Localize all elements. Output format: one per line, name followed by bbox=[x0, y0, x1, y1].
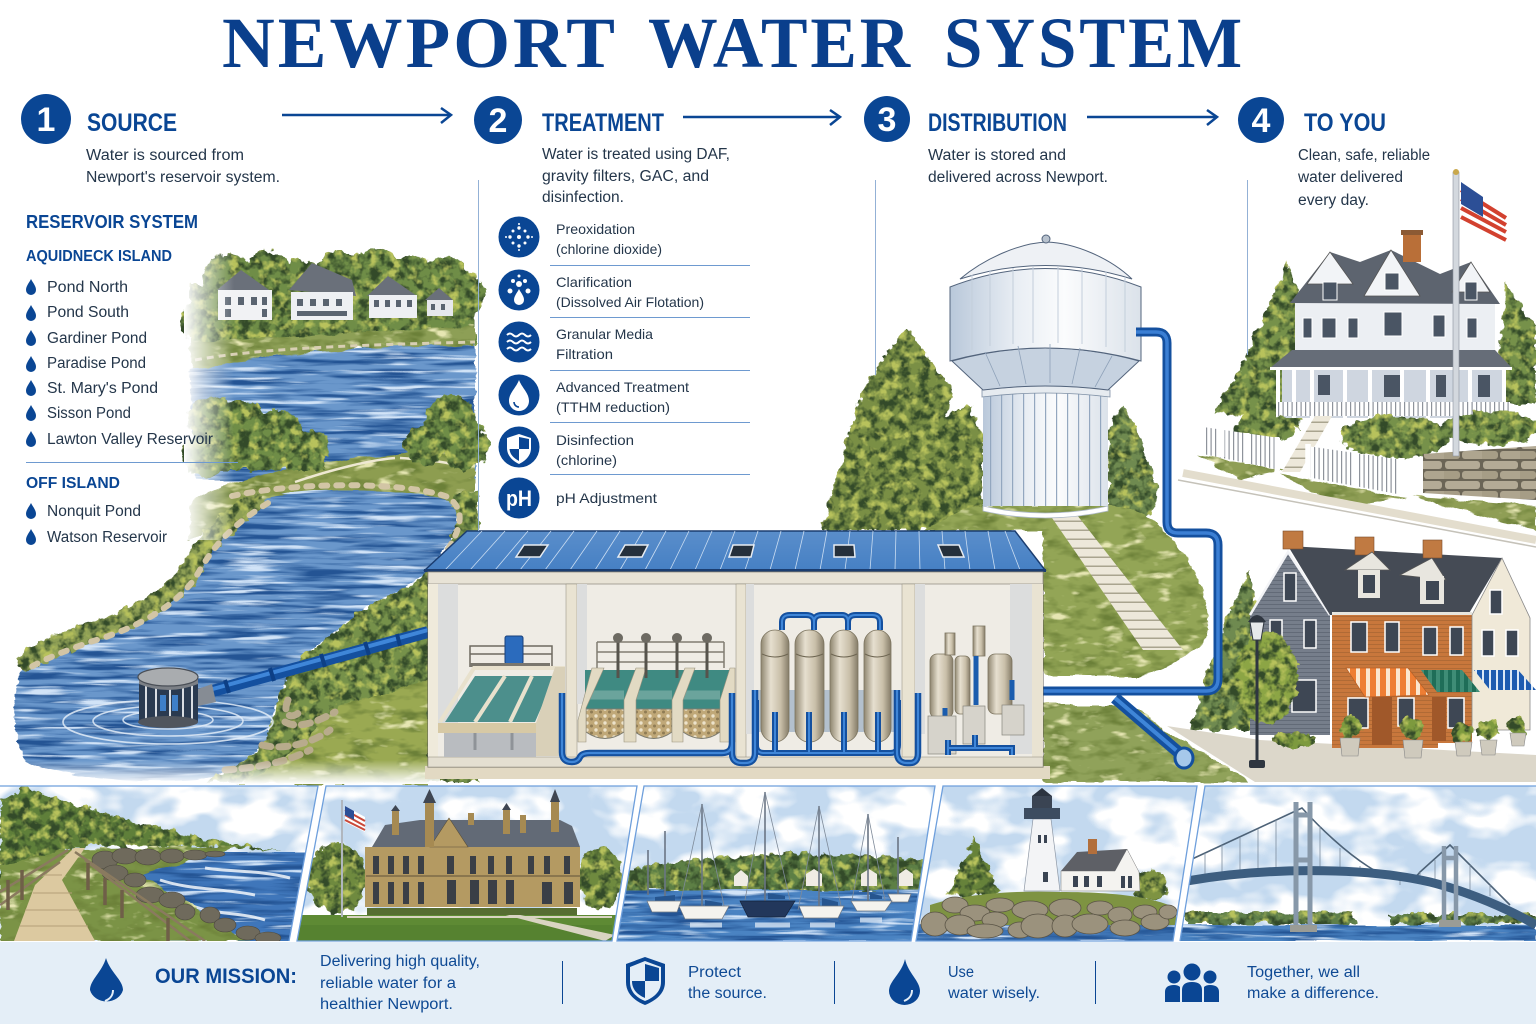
call to action: use wisely: Use bbox=[948, 964, 974, 981]
off island reservoirs: Watson Reservoir bbox=[47, 529, 167, 546]
panel: reservoir system list bbox=[26, 211, 238, 546]
illustration: blue delivery pipe bbox=[1043, 332, 1218, 768]
mission banner bbox=[0, 942, 1536, 1024]
description bbox=[928, 147, 1108, 186]
step: pH adjustment bbox=[498, 478, 657, 518]
flagpole and flag bbox=[1453, 169, 1506, 456]
title bbox=[222, 3, 1245, 83]
icon: pH bbox=[498, 478, 540, 518]
picket fence right bbox=[1307, 444, 1403, 496]
number badge 4 bbox=[1238, 97, 1284, 143]
lower lake bbox=[14, 490, 457, 781]
label: Clarification bbox=[556, 274, 632, 290]
side lawn bbox=[1043, 704, 1250, 782]
icon: shield bbox=[498, 426, 540, 468]
garden trees bbox=[1213, 263, 1536, 430]
boulders bbox=[92, 848, 281, 944]
call to action: together: make a difference. bbox=[1247, 985, 1379, 1002]
description: disinfection. bbox=[542, 189, 624, 206]
mission statement: healthier Newport. bbox=[320, 996, 453, 1013]
label: Preoxidation bbox=[556, 221, 635, 237]
cell 1: dissolved air flotation bbox=[438, 636, 565, 757]
description: Water is stored and bbox=[928, 147, 1066, 164]
icon: shield bbox=[626, 957, 665, 1005]
label: Disinfection bbox=[556, 432, 634, 448]
description: water delivered bbox=[1297, 169, 1403, 186]
trees behind the lakeside homes bbox=[181, 248, 486, 347]
planters bbox=[1273, 717, 1526, 758]
dormers bbox=[1345, 552, 1446, 604]
Aquidneck reservoirs: Lawton Valley Reservoir bbox=[47, 431, 213, 448]
water ripples round the intake bbox=[63, 700, 273, 744]
illustration: hill with water tower bbox=[823, 235, 1208, 676]
illustration: main street shops bbox=[1043, 531, 1536, 782]
icon: pH: pH bbox=[506, 486, 532, 511]
icon: dots burst bbox=[498, 216, 540, 258]
arrow: treatment to distribution bbox=[683, 110, 840, 125]
Aquidneck reservoirs bbox=[26, 279, 213, 448]
green awning bbox=[1421, 670, 1480, 692]
sidewalk bbox=[1183, 473, 1536, 540]
title: NEWPORT bbox=[222, 3, 618, 83]
icon: waves bbox=[498, 322, 540, 362]
heading: SOURCE bbox=[87, 109, 177, 137]
call to action: together bbox=[1247, 964, 1379, 1002]
upper lake shoreline bbox=[190, 326, 475, 368]
panel: treatment processes bbox=[498, 216, 750, 518]
dark main roof bbox=[1288, 546, 1502, 615]
stone wall bbox=[1423, 446, 1536, 500]
front steps bbox=[1282, 416, 1332, 472]
photo: mansion bbox=[295, 786, 640, 941]
Aquidneck reservoirs: St. Mary's Pond bbox=[47, 380, 158, 397]
arrow: distribution to you bbox=[1087, 110, 1217, 125]
icon: water drop bbox=[889, 959, 920, 1005]
label: Advanced Treatment bbox=[556, 379, 689, 395]
intake structure bbox=[138, 668, 216, 728]
Aquidneck reservoirs: Sisson Pond bbox=[47, 405, 131, 422]
panel: photo strip bbox=[0, 786, 1536, 944]
process pipework bbox=[562, 690, 918, 763]
tower base column bbox=[982, 386, 1110, 518]
description bbox=[542, 146, 730, 206]
lakeside home 4 bbox=[425, 288, 453, 316]
number badge 3: 3 bbox=[878, 101, 896, 139]
call to action: protect bbox=[688, 964, 767, 1002]
off island reservoirs bbox=[26, 503, 167, 546]
icon: drop bbox=[498, 374, 540, 416]
intake pipe bbox=[198, 630, 428, 695]
street lamp bbox=[1248, 615, 1266, 768]
title: WATER bbox=[648, 3, 913, 83]
walking path bbox=[14, 848, 95, 941]
step: disinfection bbox=[498, 426, 634, 468]
number badge 2: 2 bbox=[489, 102, 507, 140]
call to action: protect: the source. bbox=[688, 985, 767, 1002]
lakeside home 3 bbox=[367, 276, 417, 318]
mission statement bbox=[320, 953, 480, 1013]
cream house bbox=[1472, 558, 1530, 730]
number badge 3 bbox=[864, 96, 910, 142]
Aquidneck reservoirs: Paradise Pond bbox=[47, 355, 146, 372]
step: advanced treatment bbox=[498, 374, 689, 416]
wraparound porch bbox=[1270, 350, 1512, 418]
left shoreline bbox=[20, 497, 262, 665]
label: Filtration bbox=[556, 346, 613, 362]
right evergreen bbox=[1108, 405, 1158, 517]
pavement bbox=[1167, 726, 1536, 782]
photo: marina bbox=[615, 786, 940, 941]
mission statement: reliable water for a bbox=[320, 975, 456, 992]
blue awning bbox=[1474, 670, 1536, 690]
cell 2: granular media filters bbox=[578, 633, 735, 742]
label: (chlorine dioxide) bbox=[556, 241, 662, 257]
upper lake bbox=[190, 338, 475, 480]
subheading: Off Island: OFF ISLAND bbox=[26, 475, 120, 492]
description: Water is treated using DAF, bbox=[542, 146, 730, 163]
off island reservoirs: Nonquit Pond bbox=[47, 503, 141, 520]
step: granular media filtration bbox=[498, 322, 653, 362]
lakeside home 2 bbox=[289, 263, 356, 320]
cell 3: GAC vessels bbox=[756, 615, 898, 753]
Aquidneck reservoirs: Gardiner Pond bbox=[47, 330, 147, 347]
description: delivered across Newport. bbox=[928, 169, 1108, 186]
label: (TTHM reduction) bbox=[556, 399, 670, 415]
icon: people bbox=[1165, 964, 1219, 1002]
list heading: RESERVOIR SYSTEM bbox=[26, 211, 198, 232]
step 1: source bbox=[21, 94, 280, 186]
icon: mission drop bbox=[90, 958, 123, 1001]
label: pH Adjustment bbox=[556, 490, 657, 506]
label: (chlorine) bbox=[556, 452, 617, 468]
number badge 1: 1 bbox=[37, 101, 55, 139]
chimneys bbox=[1283, 531, 1442, 558]
icon: rising bubbles bbox=[498, 270, 540, 310]
call to action: use wisely: water wisely. bbox=[947, 985, 1040, 1002]
left evergreen bbox=[823, 328, 983, 530]
subheading: Aquidneck Island: AQUIDNECK ISLAND bbox=[26, 248, 172, 265]
tree clumps on upper lake bbox=[183, 394, 489, 477]
middle land bridge bbox=[190, 448, 475, 540]
panel frames bbox=[0, 786, 1536, 941]
island boulders bbox=[921, 897, 1177, 938]
description: every day. bbox=[1298, 192, 1369, 209]
ground under the building bbox=[425, 766, 1050, 779]
label bbox=[556, 432, 634, 468]
brick row bbox=[1332, 612, 1472, 748]
photo: lighthouse bbox=[915, 786, 1200, 941]
description: gravity filters, GAC, and bbox=[542, 168, 709, 185]
label: Granular Media bbox=[556, 326, 653, 342]
label: (Dissolved Air Flotation) bbox=[556, 294, 704, 310]
call to action: protect: Protect bbox=[688, 964, 742, 981]
lawn strips bbox=[1197, 455, 1536, 530]
heading: DISTRIBUTION bbox=[928, 109, 1067, 137]
Aquidneck reservoirs: Pond South bbox=[47, 304, 129, 321]
description bbox=[86, 147, 280, 186]
soft left fade bbox=[184, 240, 234, 540]
label bbox=[556, 379, 689, 415]
heading: TREATMENT bbox=[542, 109, 664, 137]
shrubs bbox=[1235, 411, 1536, 458]
illustration: reservoir landscape bbox=[0, 240, 489, 784]
house upper storey and roof bbox=[1290, 230, 1500, 352]
gray clapboard house bbox=[1250, 552, 1330, 735]
description bbox=[1297, 147, 1430, 209]
description: Water is sourced from bbox=[86, 147, 244, 164]
treatment plant building bbox=[424, 531, 1050, 779]
orange awning bbox=[1346, 668, 1429, 697]
label bbox=[556, 274, 704, 310]
mission heading: OUR MISSION: bbox=[155, 965, 297, 988]
photo: suspension bridge bbox=[1178, 786, 1536, 941]
step 2: treatment bbox=[474, 96, 730, 206]
cell 4: chemical feed equipment bbox=[928, 626, 1024, 755]
title: SYSTEM bbox=[944, 3, 1245, 83]
heading: TO YOU bbox=[1304, 109, 1386, 137]
illustration: house on the hill bbox=[1178, 169, 1536, 547]
description: Clean, safe, reliable bbox=[1298, 147, 1430, 164]
step: preoxidation bbox=[498, 216, 662, 258]
description: Newport's reservoir system. bbox=[86, 169, 280, 186]
Aquidneck reservoirs: Pond North bbox=[47, 279, 128, 296]
arrow: source to treatment bbox=[282, 108, 451, 123]
picket fence left bbox=[1203, 427, 1280, 472]
hillside stairs bbox=[1050, 515, 1183, 650]
back street tree bbox=[1190, 570, 1262, 730]
label bbox=[556, 221, 662, 257]
step 4: to you bbox=[1238, 97, 1430, 209]
bottom fade of the landscape bbox=[0, 760, 440, 784]
grassy hill bbox=[923, 505, 1208, 676]
tower tank bbox=[950, 235, 1141, 390]
number badge 1 bbox=[21, 94, 71, 144]
number badge 4: 4 bbox=[1252, 102, 1271, 140]
step 3: distribution bbox=[864, 96, 1108, 186]
front street tree bbox=[1234, 632, 1298, 724]
number badge 2 bbox=[474, 96, 522, 144]
step: clarification bbox=[498, 270, 704, 310]
roof bbox=[424, 531, 1046, 572]
concrete frame and back wall bbox=[428, 572, 1043, 767]
fence bbox=[0, 850, 205, 941]
label bbox=[556, 326, 653, 362]
shoreline rocks bbox=[232, 485, 460, 572]
lower right meadow bbox=[235, 680, 428, 784]
mission statement: Delivering high quality, bbox=[320, 953, 480, 970]
lakeside home 1 bbox=[217, 270, 272, 320]
call to action: use wisely bbox=[947, 964, 1040, 1002]
right bank bbox=[205, 490, 478, 782]
call to action: together: Together, we all bbox=[1247, 964, 1360, 981]
photo: cliff walk bbox=[0, 786, 320, 944]
